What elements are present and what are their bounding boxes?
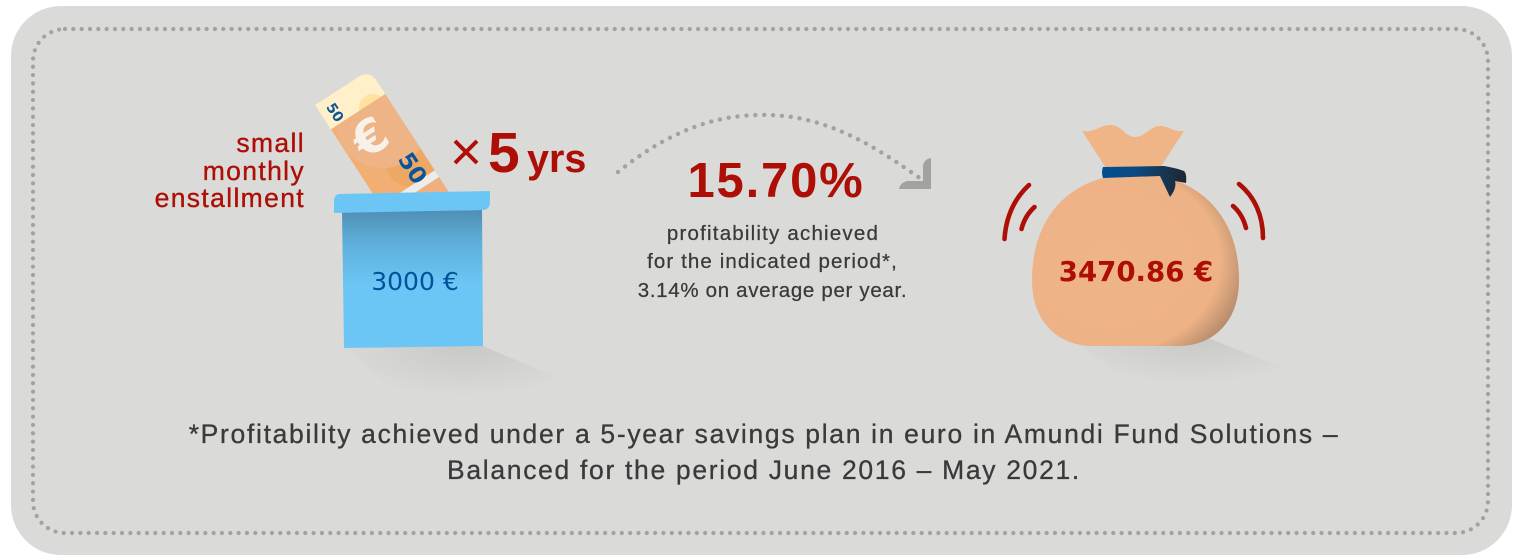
label: small monthly enstallment: enstallment — [155, 183, 305, 213]
bag shadow — [1078, 338, 1320, 382]
footnote: Balanced for the period June 2016 – May 2021. — [447, 455, 1081, 485]
box front — [342, 210, 483, 348]
text: profitability description: for the indicated period*, — [647, 250, 898, 273]
label: note value large: 50 — [392, 148, 431, 189]
label: times 5 years — [455, 121, 586, 185]
footnote: *Profitability achieved under a 5-year savings plan in euro in Amundi Fund Solutions – — [189, 419, 1339, 449]
footnote — [189, 419, 1339, 485]
arrow head — [899, 158, 931, 189]
label: small monthly enstallment: small — [236, 128, 305, 158]
label: small monthly enstallment — [155, 128, 305, 213]
box shadow — [344, 346, 596, 394]
illustration: money box with banknote — [315, 54, 596, 394]
bag amount: 3470.86 € — [1059, 255, 1213, 288]
bag body — [1032, 174, 1239, 346]
text: profitability description — [638, 222, 907, 302]
label: times 5 years: 5 — [488, 121, 520, 185]
label: note value small: 50 — [322, 100, 347, 126]
icon: shake lines right — [1233, 184, 1263, 238]
box amount: 3000 € — [371, 267, 459, 296]
bag neck — [1082, 125, 1184, 168]
label: times 5 years: yrs — [527, 137, 586, 181]
arrow: dotted arc — [618, 115, 931, 189]
label: small monthly enstallment: monthly — [203, 156, 305, 186]
bag tie — [1102, 166, 1186, 197]
icon: euro sign: € — [341, 106, 399, 171]
illustration: money bag — [1004, 125, 1320, 382]
icon: banknote — [315, 74, 449, 194]
icon: shake lines left — [1004, 185, 1034, 239]
text: profitability description: 3.14% on average per year. — [638, 279, 907, 302]
heading: 15.70%: 15.70% — [688, 154, 864, 208]
icon: multiply — [455, 141, 477, 163]
text: profitability description: profitability achieved — [667, 222, 879, 245]
box lid — [334, 191, 490, 213]
